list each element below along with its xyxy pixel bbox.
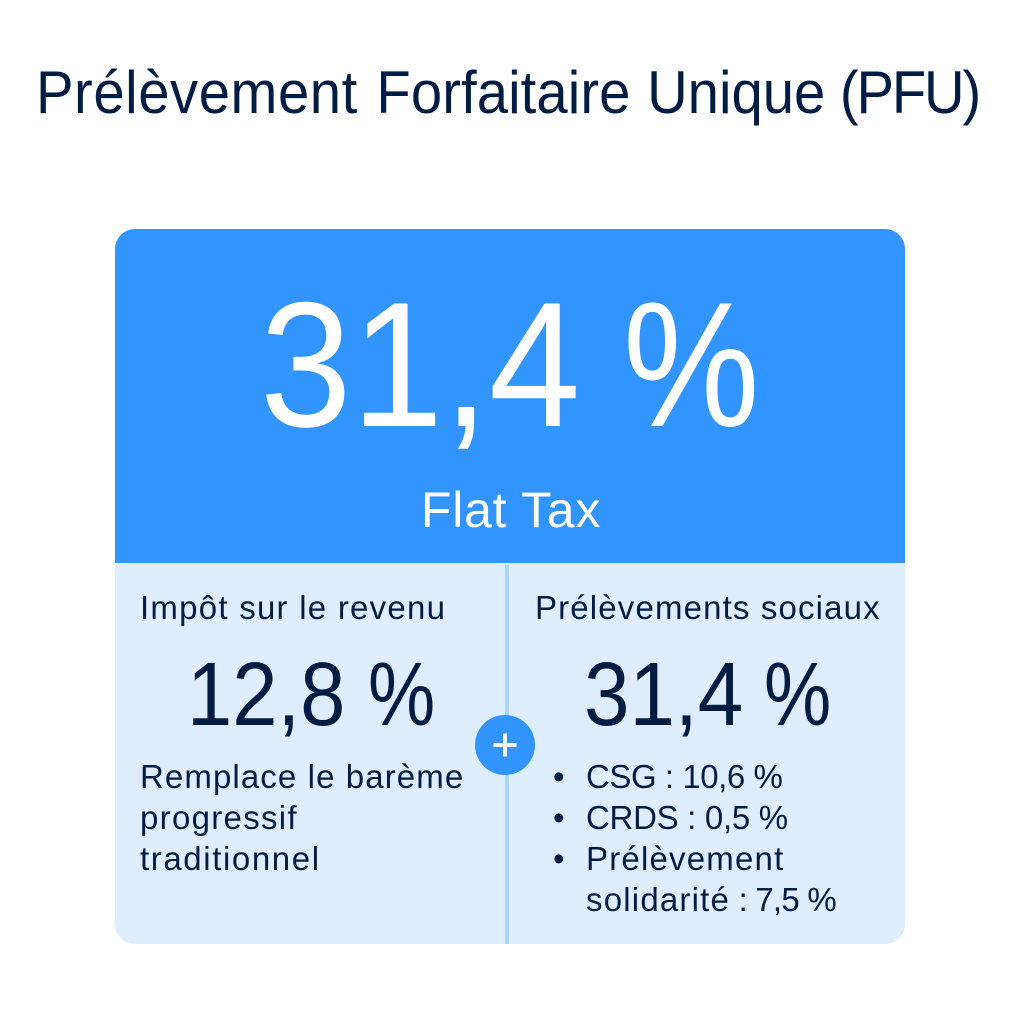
- list: prélèvements breakdown: •: [553, 758, 565, 795]
- list: prélèvements breakdown: •: [553, 840, 565, 877]
- panel: breakdown: [115, 563, 905, 944]
- rate: prélèvements: %: [764, 645, 832, 745]
- heading: prélèvements: Prélèvements sociaux: [535, 589, 881, 626]
- flat tax rate: 31,4: [260, 265, 580, 464]
- flat tax rate: %: [623, 265, 759, 464]
- rate: impôt: [186, 645, 436, 745]
- column divider: [505, 565, 509, 944]
- icon: plus: [475, 715, 535, 775]
- rate: impôt: 12,8: [186, 645, 345, 745]
- flat tax label: Flat Tax: [421, 482, 601, 538]
- list: prélèvements breakdown: solidarité : 7,5 %: [586, 881, 836, 918]
- list: prélèvements breakdown: [553, 758, 836, 918]
- list: prélèvements breakdown: •: [553, 799, 565, 836]
- rate: impôt: %: [368, 645, 436, 745]
- title: Prélèvement Forfaitaire Unique (PFU): [36, 59, 979, 126]
- panel: flat tax: [115, 229, 905, 563]
- rate: prélèvements: [584, 645, 832, 745]
- rate: prélèvements: 31,4: [584, 645, 743, 745]
- text: impôt description: Remplace le barème: [140, 758, 464, 795]
- list: prélèvements breakdown: CSG : 10,6 %: [586, 758, 782, 795]
- text: impôt description: [140, 758, 464, 877]
- list: prélèvements breakdown: Prélèvement: [586, 840, 784, 877]
- text: impôt description: traditionnel: [140, 840, 321, 877]
- heading: impôt: Impôt sur le revenu: [140, 589, 446, 626]
- list: prélèvements breakdown: CRDS : 0,5 %: [586, 799, 788, 836]
- text: impôt description: progressif: [140, 799, 298, 836]
- flat tax rate: [260, 265, 759, 464]
